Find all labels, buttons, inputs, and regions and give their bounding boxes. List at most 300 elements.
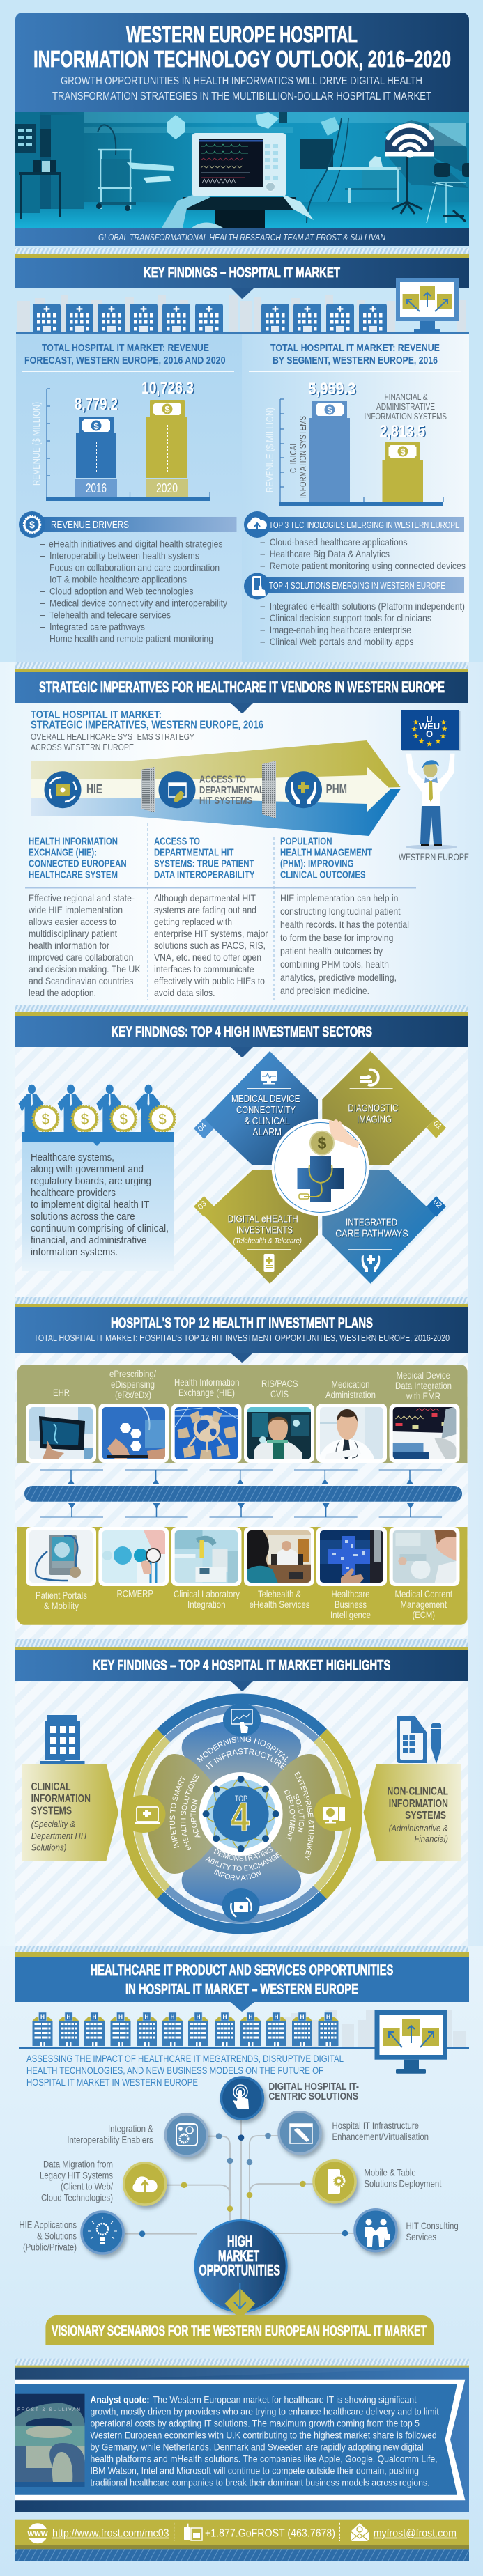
labels: top row: RIS/PACS [261, 1378, 298, 1389]
icon: monitor with arrows [375, 2010, 447, 2074]
column: departmental access: solutions such as PACS, RIS, [154, 940, 266, 951]
icon: PHM hands [285, 771, 322, 808]
node: HIE applications: (Public/Private) [23, 2242, 77, 2253]
icon: phone [184, 2524, 202, 2540]
icon: document and pencil [397, 1716, 441, 1764]
node: digital hospital IT-centric solutions [221, 2077, 359, 2119]
icon: investors with coins: $ [158, 1110, 167, 1128]
column: departmental access: ACCESS TO [154, 836, 200, 848]
strategy arrow: HIE [86, 782, 102, 796]
bar chart: 2016 vs 2020 revenue: REVENUE ($ MILLION) [31, 402, 43, 486]
skyline and hospital row [19, 2010, 469, 2049]
labels: bottom row: Patient Portals [36, 1590, 87, 1601]
bar chart: revenue by segment: $ [327, 405, 332, 415]
column: HIE: multidisciplinary patient [29, 928, 117, 939]
header panel [15, 13, 473, 246]
callout: non-clinical information systems: INFORMATION [389, 1798, 448, 1810]
node: HIT consulting services [355, 2210, 459, 2251]
tile: EHR [26, 1404, 96, 1463]
center circle: coin and medical cross: $ [318, 1134, 327, 1152]
tile: RCM/ERP [98, 1527, 169, 1586]
top 4 solutions list: Integrated eHealth solutions (Platform independent) [270, 601, 465, 612]
book cover [15, 2394, 85, 2487]
center badge: top 4 [199, 1772, 283, 1856]
quote text: by Germany, while Netherlands, Denmark and Sweeden are rapidly adopting new digital [91, 2441, 424, 2452]
icon: exchange folder [222, 1888, 260, 1922]
top 3 technologies list: Cloud-based healthcare applications [270, 537, 408, 548]
opportunity connector lines [125, 2118, 354, 2237]
EU flag [401, 710, 460, 751]
wheel: top 4 highlights: ENTERPRISE &TURNKEY [294, 1771, 314, 1861]
curved labels: IT INFRASTRUCTURE [206, 1748, 286, 1770]
hero photo: operating room with patient monitor [15, 112, 469, 228]
column: HIE: health information for [29, 940, 109, 951]
labels: bottom row: Telehealth & [258, 1588, 302, 1599]
diamond 02: integrated care pathways [322, 1170, 446, 1284]
diamond 04: medical device connectivity: ALARM [252, 1126, 282, 1138]
hub: high market opportunities: MARKET [218, 2247, 259, 2265]
column: departmental access: enterprise HIT systems, major [154, 928, 268, 939]
node: digital hospital IT-centric solutions: DIGITAL HOSPITAL IT- [268, 2081, 359, 2093]
labels: bottom row: Management [400, 1599, 447, 1610]
connectors above bar [40, 1470, 442, 1484]
skyline with hospital row [16, 295, 469, 334]
wheel: top 4 highlights: INFORMATION [214, 1869, 261, 1881]
labels: bottom row: & Mobility [44, 1600, 79, 1611]
tile: ePrescribing [98, 1404, 169, 1463]
strategy arrow: ACCESS TO [199, 774, 246, 786]
text block: to implement digital health IT [31, 1199, 149, 1211]
top 3 technologies list: Remote patient monitoring using connected devices [270, 561, 466, 571]
panel: top row investment plans [17, 1365, 467, 1463]
section heading: product and services opportunities [15, 1946, 469, 2012]
labels: top row: ePrescribing/ [109, 1368, 156, 1379]
icon: monitor with arrows [396, 278, 459, 333]
figure: businessman holding flag [406, 754, 457, 850]
section heading: top 12 investment plans [15, 1297, 468, 1639]
callout: non-clinical information systems: NON-CLINICAL [388, 1786, 448, 1798]
labels: bottom row [36, 1588, 452, 1620]
footer: contact details: myfrost@frost.com [374, 2528, 457, 2540]
column: PHM: (PHM): IMPROVING [280, 858, 353, 870]
text block: along with government and [31, 1163, 144, 1175]
callout: clinical information systems: Department HIT [31, 1831, 89, 1841]
node: HIT consulting services: HIT Consulting [406, 2220, 459, 2231]
section heading: product and services opportunities: IN HOSPITAL IT MARKET – WESTERN EUROPE [125, 1982, 358, 1998]
panel: revenue by segment [242, 334, 469, 662]
bar chart: revenue by segment: REVENUE ($ MILLION) [265, 408, 276, 492]
panel: revenue forecast [16, 334, 242, 662]
node: mobile and tablet deployment [314, 2161, 441, 2203]
curved labels: MODERNISING HOSPITAL [197, 1736, 289, 1763]
diamond 02: integrated care pathways: CARE PATHWAYS [335, 1227, 408, 1239]
book cover: FROST & SULLIVAN [17, 2407, 80, 2412]
top 4 solutions header [244, 573, 464, 599]
quote text: traditional healthcare companies to break their dominant business models across regions. [91, 2476, 429, 2488]
credit line: GLOBAL TRANSFORMATIONAL HEALTH RESEARCH TEAM AT FROST & SULLIVAN [98, 233, 386, 242]
column: PHM: to form the base for improving [280, 932, 393, 943]
section heading: top 4 high investment sectors: KEY FINDINGS: TOP 4 HIGH INVESTMENT SECTORS [112, 1024, 372, 1040]
column: HIE: and decision making. The UK [29, 963, 141, 975]
strategic imperatives subheading [31, 709, 263, 752]
callout: clinical information systems: (Speciality & [31, 1819, 75, 1829]
bar chart: revenue by segment: CLINICAL [289, 442, 298, 473]
column: PHM: analytics, predictive modelling, [280, 972, 397, 983]
node: HIE applications: & Solutions [37, 2230, 77, 2242]
diamond 04: medical device connectivity: MEDICAL DEVICE [231, 1093, 300, 1105]
panel: healthcare systems investors [18, 1085, 176, 1271]
node: data migration: (Client to Web/ [61, 2181, 113, 2192]
labels: top row: CVIS [270, 1388, 289, 1399]
callout: non-clinical information systems [364, 1764, 461, 1861]
revenue drivers header [19, 511, 237, 538]
column: departmental access: effectively with public HIEs to [154, 975, 265, 986]
imperative columns [25, 823, 416, 1000]
revenue drivers list [40, 539, 227, 644]
revenue drivers list: Integrated care pathways [49, 621, 145, 633]
bar chart: revenue by segment: INFORMATION SYSTEMS [364, 411, 447, 421]
panel: analyst quote [15, 2359, 469, 2512]
strategy arrow: DEPARTMENTAL [199, 784, 264, 796]
section heading: key findings hospital IT market: KEY FINDINGS – HOSPITAL IT MARKET [144, 265, 340, 281]
strategic imperatives subheading: OVERALL HEALTHCARE SYSTEMS STRATEGY [31, 731, 194, 742]
hub: high market opportunities: OPPORTUNITIES [199, 2262, 280, 2279]
node: mobile and tablet deployment: Solutions Deployment [364, 2178, 441, 2189]
column: HIE [28, 836, 141, 998]
subtitle [52, 75, 431, 102]
bar chart: revenue by segment [265, 380, 447, 506]
callout: clinical information systems: CLINICAL [31, 1781, 71, 1793]
panel: bottom row investment plans [17, 1527, 467, 1625]
diamond 03: digital eHealth investments: DIGITAL eHEALTH [228, 1213, 298, 1225]
node: HIE applications: HIE Applications [19, 2219, 77, 2230]
labels: bottom row: (ECM) [413, 1609, 435, 1620]
tile: telehealth [244, 1527, 314, 1586]
icon: web: www [27, 2528, 48, 2538]
icon: web [26, 2523, 49, 2543]
bar chart: 2016 vs 2020 revenue: $ [93, 421, 99, 431]
column: departmental access: DATA INTEROPERABILITY [154, 869, 255, 881]
top 3 technologies header [244, 511, 464, 538]
labels: top row: EHR [53, 1387, 70, 1398]
firewall pillar [262, 761, 276, 818]
bar chart: revenue by segment: ADMINISTRATIVE [376, 401, 435, 412]
labels: bottom row: Clinical Laboratory [174, 1588, 240, 1599]
column: PHM [280, 836, 409, 996]
title: WESTERN EUROPE HOSPITAL [126, 22, 358, 47]
hub: high market opportunities [195, 2221, 286, 2319]
column: PHM: POPULATION [280, 836, 332, 848]
node: data migration: Legacy HIT Systems [40, 2170, 113, 2181]
callout: non-clinical information systems: SYSTEMS [405, 1810, 446, 1822]
strategic imperatives subheading: TOTAL HOSPITAL IT MARKET: [31, 709, 162, 721]
bar chart: 2016 vs 2020 revenue [31, 379, 210, 501]
strategic imperatives subheading: STRATEGIC IMPERATIVES, WESTERN EUROPE, 2016 [31, 720, 263, 731]
labels: top row: Medical Device [396, 1370, 450, 1381]
section heading: top 4 high investment sectors [15, 1005, 468, 1297]
diamond 01: diagnostic imaging: IMAGING [357, 1114, 392, 1126]
top 4 solutions list: Clinical decision support tools for clinicians [270, 613, 431, 623]
diamond 04: medical device connectivity: 04 [197, 1122, 208, 1133]
labels: top row: Data Integration [395, 1380, 452, 1391]
diamond 01: diagnostic imaging: 01 [431, 1119, 443, 1131]
tile: medical device integration [390, 1404, 459, 1463]
outer ring [127, 1699, 357, 1929]
wheel: top 4 highlights: eHEALTH SOLUTIONS [181, 1774, 199, 1850]
top 4 solutions list [261, 601, 465, 647]
firewall pillar [141, 767, 155, 812]
heading: revenue by segment [270, 343, 440, 366]
callout: non-clinical information systems: (Administrative & [389, 1823, 448, 1833]
diamond 03: digital eHealth investments [194, 1170, 318, 1284]
EU flag: U [426, 714, 433, 724]
connectors below bar [40, 1503, 442, 1517]
tile: medical content management [390, 1527, 459, 1586]
column: PHM: CLINICAL OUTCOMES [280, 869, 366, 881]
heading: revenue by segment: TOTAL HOSPITAL IT MARKET: REVENUE [270, 343, 440, 354]
petal: enterprise [271, 1754, 335, 1874]
column: departmental access: systems are fading out and [154, 904, 256, 915]
wheel: top 4 highlights: ADOPTION [191, 1799, 201, 1838]
icon: eHealth laptop [121, 1795, 166, 1833]
section heading: top 4 hospital IT market highlights [15, 1639, 468, 1946]
bar chart: revenue by segment: 2,813.5 [379, 422, 425, 441]
node: data migration: Cloud Technologies) [41, 2192, 113, 2203]
column: departmental access: interfaces to communicate [154, 963, 254, 975]
quote text: Analyst quote: [91, 2393, 149, 2405]
heading: revenue forecast: TOTAL HOSPITAL IT MARKET: REVENUE [42, 343, 209, 354]
text block: regulatory boards, are urging [31, 1175, 151, 1187]
diamond 04: medical device connectivity: CONNECTIVITY [236, 1104, 296, 1116]
icon: investors with coins: $ [41, 1110, 50, 1128]
quote text: growth, mostly driven by providers who are trying to enhance healthcare delivery and to limit [91, 2405, 439, 2416]
column: HIE: and Scandinavian countries [29, 975, 133, 986]
banner: visionary scenarios [45, 2315, 434, 2345]
node: hospital IT infrastructure enhancement: Hospital IT Infrastructure [332, 2120, 419, 2131]
footer: contact details: +1.877.GoFROST (463.7678) [205, 2528, 335, 2540]
diamond 01: diagnostic imaging [322, 1051, 446, 1165]
column: departmental access [154, 836, 268, 998]
icon: HIE folder [45, 771, 81, 808]
labels: bottom row: eHealth Services [250, 1599, 309, 1610]
node: integration and interoperability enablers [67, 2114, 207, 2156]
intro text: HOSPITAL IT MARKET IN WESTERN EUROPE [26, 2077, 198, 2088]
bar chart: revenue by segment: FINANCIAL & [385, 391, 428, 402]
strategy arrow [31, 740, 401, 836]
labels: top row: (eRx/eDx) [115, 1389, 151, 1400]
callout: clinical information systems: INFORMATION [31, 1793, 91, 1805]
revenue drivers list: Medical device connectivity and interoperability [49, 598, 227, 609]
node: mobile and tablet deployment: Mobile & Table [364, 2167, 416, 2178]
intro text: HEALTH TECHNOLOGIES, AND NEW BUSINESS MODELS ON THE FUTURE OF [26, 2065, 323, 2076]
bar chart: 2016 vs 2020 revenue: 2016 [86, 481, 107, 495]
icon: enterprise computer [314, 1794, 359, 1831]
quote text: health platforms and mHealth solutions. The companies like Apple, Google, Qualcomm Life, [91, 2453, 438, 2464]
tile: business intelligence [316, 1527, 387, 1586]
column: HIE: CONNECTED EUROPEAN [29, 858, 127, 870]
strategy arrow: HIT SYSTEMS [199, 795, 252, 807]
node: integration and interoperability enablers: Interoperability Enablers [67, 2134, 153, 2146]
quote text [91, 2393, 439, 2488]
column: departmental access: avoid data silos. [154, 987, 215, 998]
strategic imperatives subheading: ACROSS WESTERN EUROPE [31, 742, 134, 752]
strategy arrow: PHM [326, 782, 347, 796]
quote text: IBM Watson, Intel and Microsoft will continue to compete outside their domain, pushing [91, 2465, 419, 2476]
diamond 03: digital eHealth investments: INVESTMENTS [236, 1225, 293, 1236]
node: digital hospital IT-centric solutions: CENTRIC SOLUTIONS [268, 2090, 358, 2102]
title [33, 22, 451, 72]
node: hospital IT infrastructure enhancement [279, 2112, 429, 2154]
column: PHM: constructing longitudinal patient [280, 906, 401, 917]
labels: top row: eDispensing [111, 1379, 155, 1390]
column: PHM: HEALTH MANAGEMENT [280, 847, 372, 859]
node: data migration: Data Migration from [43, 2159, 113, 2170]
column: PHM: and precision medicine. [280, 985, 369, 996]
labels: bottom row: Integration [187, 1599, 226, 1610]
icon: investors with coins: $ [119, 1110, 128, 1128]
column: departmental access: Although departmental HIT [154, 892, 256, 903]
revenue drivers list: Focus on collaboration and care coordination [49, 563, 220, 573]
column: HIE: EXCHANGE (HIE): [29, 847, 97, 859]
wheel: top 4 highlights: IMPETUS TO SMART [170, 1775, 185, 1849]
labels: top row: Exchange (HIE) [178, 1387, 235, 1398]
column: departmental access: getting replaced with [154, 916, 232, 927]
text block: healthcare providers [31, 1187, 116, 1199]
heading: revenue forecast [24, 343, 226, 366]
bar chart: revenue by segment: $ [400, 447, 406, 457]
node: integration and interoperability enablers: Integration & [108, 2123, 153, 2134]
wheel: top 4 highlights: DEMONSTRATING [213, 1847, 273, 1861]
tile: clinical laboratory [171, 1527, 241, 1586]
tile: patient portals [26, 1527, 96, 1586]
revenue drivers header: REVENUE DRIVERS [51, 520, 129, 531]
labels: bottom row: RCM/ERP [117, 1588, 153, 1599]
hospital investment bar [24, 1486, 462, 1502]
labels: bottom row: Intelligence [330, 1609, 371, 1620]
diamond 04: medical device connectivity: & CLINICAL [244, 1115, 290, 1127]
diamond 02: integrated care pathways: 02 [431, 1198, 443, 1210]
top 4 solutions list: Clinical Web portals and mobility apps [270, 637, 414, 647]
column: PHM: HIE implementation can help in [280, 892, 399, 903]
EU flag: WEU [419, 721, 440, 731]
tile: RIS/PACS [244, 1404, 314, 1463]
callout: clinical information systems: Solutions) [31, 1842, 67, 1853]
center badge: top 4: TOP [235, 1794, 247, 1803]
column: HIE: HEALTHCARE SYSTEM [29, 869, 118, 881]
column: HIE: allows easier access to [29, 916, 116, 927]
icon: investors with coins [18, 1085, 176, 1132]
quote text: The Western European market for healthcare IT is showing significant [153, 2393, 417, 2405]
node: HIE applications [19, 2212, 123, 2253]
callout: non-clinical information systems: Financial) [414, 1833, 448, 1844]
column: PHM: health records. It has the potential [280, 919, 409, 930]
icon: modernising dashboard [223, 1703, 261, 1737]
heading: revenue by segment: BY SEGMENT, WESTERN EUROPE, 2016 [273, 355, 438, 366]
footer: contact details: http://www.frost.com/mc03 [52, 2528, 169, 2540]
node: hospital IT infrastructure enhancement: Enhancement/Virtualisation [332, 2131, 429, 2142]
node: HIT consulting services: Services [406, 2231, 436, 2242]
revenue drivers list: Cloud adoption and Web technologies [49, 587, 194, 596]
bar chart: revenue by segment: 5,959.3 [308, 380, 355, 398]
wheel: top 4 highlights [121, 1694, 362, 1934]
column: HIE: lead the adoption. [29, 987, 96, 998]
labels: top row: Health Information [174, 1376, 240, 1388]
text block: solutions across the care [31, 1211, 135, 1223]
labels: top row: with EMR [406, 1390, 440, 1402]
callout: clinical information systems: SYSTEMS [31, 1806, 72, 1817]
icon: departmental access [159, 771, 195, 808]
icon: investors with coins: $ [80, 1110, 89, 1128]
quote text: Western European economies with U.K contributing to the highest market share is followed [91, 2429, 437, 2440]
column: departmental access: VNA, etc. need to offer open [154, 952, 261, 963]
wheel: top 4 highlights: DEPLOYMENT [284, 1789, 296, 1842]
wheel: top 4 highlights: ABILITY TO EXCHANGE [205, 1852, 282, 1871]
quote text: operational costs by adopting IT solutions. The maximum growth coming from the top 5 [91, 2417, 420, 2428]
revenue drivers list: Telehealth and telecare services [49, 610, 171, 620]
center badge: top 4: 4 [231, 1794, 250, 1840]
revenue drivers list: eHealth initiatives and digital health strategies [49, 539, 223, 549]
revenue drivers list: IoT & mobile healthcare applications [49, 574, 187, 585]
diamond 01: diagnostic imaging: DIAGNOSTIC [348, 1103, 399, 1115]
revenue drivers header: $ [29, 519, 35, 530]
node: data migration [40, 2159, 166, 2205]
diamond 04: medical device connectivity [194, 1051, 318, 1165]
text block: financial, and administrative [31, 1234, 146, 1246]
bar chart: 2016 vs 2020 revenue: 8,779.2 [75, 395, 118, 414]
section heading: top 12 investment plans: HOSPITAL'S TOP 12 HEALTH IT INVESTMENT PLANS [111, 1315, 373, 1331]
hub: high market opportunities: HIGH [227, 2233, 252, 2250]
diamond 02: integrated care pathways: INTEGRATED [346, 1216, 397, 1228]
column: HIE: wide HIE implementation [28, 904, 123, 915]
petal: impetus [148, 1754, 213, 1874]
section heading: key findings hospital IT market [15, 248, 469, 299]
text block: Healthcare systems, [31, 1151, 114, 1163]
intro text: ASSESSING THE IMPACT OF HEALTHCARE IT MEGATRENDS, DISRUPTIVE DIGITAL [26, 2053, 344, 2064]
heading: revenue forecast: FORECAST, WESTERN EUROPE, 2016 AND 2020 [24, 355, 226, 366]
text block [31, 1151, 169, 1258]
bar chart: 2016 vs 2020 revenue: 10,726.3 [141, 379, 194, 398]
labels: top row: Administration [325, 1389, 376, 1400]
icon: hospital building [40, 1715, 85, 1767]
tile: medication administration [316, 1404, 387, 1463]
column: HIE: HEALTH INFORMATION [29, 836, 118, 848]
labels: bottom row: Medical Content [394, 1588, 452, 1599]
labels: bottom row: Healthcare [332, 1588, 370, 1599]
revenue drivers list: Home health and remote patient monitoring [49, 634, 213, 644]
column: HIE: improved care collaboration [29, 952, 133, 963]
text block: information systems. [31, 1246, 118, 1258]
EU flag: O [426, 729, 433, 739]
icon: envelope [351, 2523, 369, 2541]
column: HIE: Effective regional and state- [29, 892, 135, 903]
wheel: top 4 highlights: SOLUTION [293, 1794, 304, 1832]
petal: modernising [182, 1722, 301, 1785]
top 4 solutions list: Image-enabling healthcare enterprise [270, 625, 411, 635]
bar chart: 2016 vs 2020 revenue: $ [164, 404, 170, 414]
labels: top row: Medication [332, 1379, 369, 1390]
petal: demonstrating [182, 1843, 301, 1906]
labels: bottom row: Business [335, 1599, 367, 1610]
column: PHM: patient health outcomes by [280, 945, 383, 956]
top 3 technologies list: Healthcare Big Data & Analytics [270, 549, 390, 559]
callout: clinical information systems [22, 1764, 118, 1861]
column: departmental access: DEPARTMENTAL HIT [154, 847, 234, 859]
revenue drivers list: Interoperability between health systems [49, 550, 199, 561]
bar chart: 2016 vs 2020 revenue: 2020 [156, 481, 178, 495]
tile: HIE globe [171, 1404, 241, 1463]
diamond 03: digital eHealth investments: (Telehealth & Telecare) [233, 1237, 302, 1246]
footer: contact details [15, 2520, 469, 2561]
